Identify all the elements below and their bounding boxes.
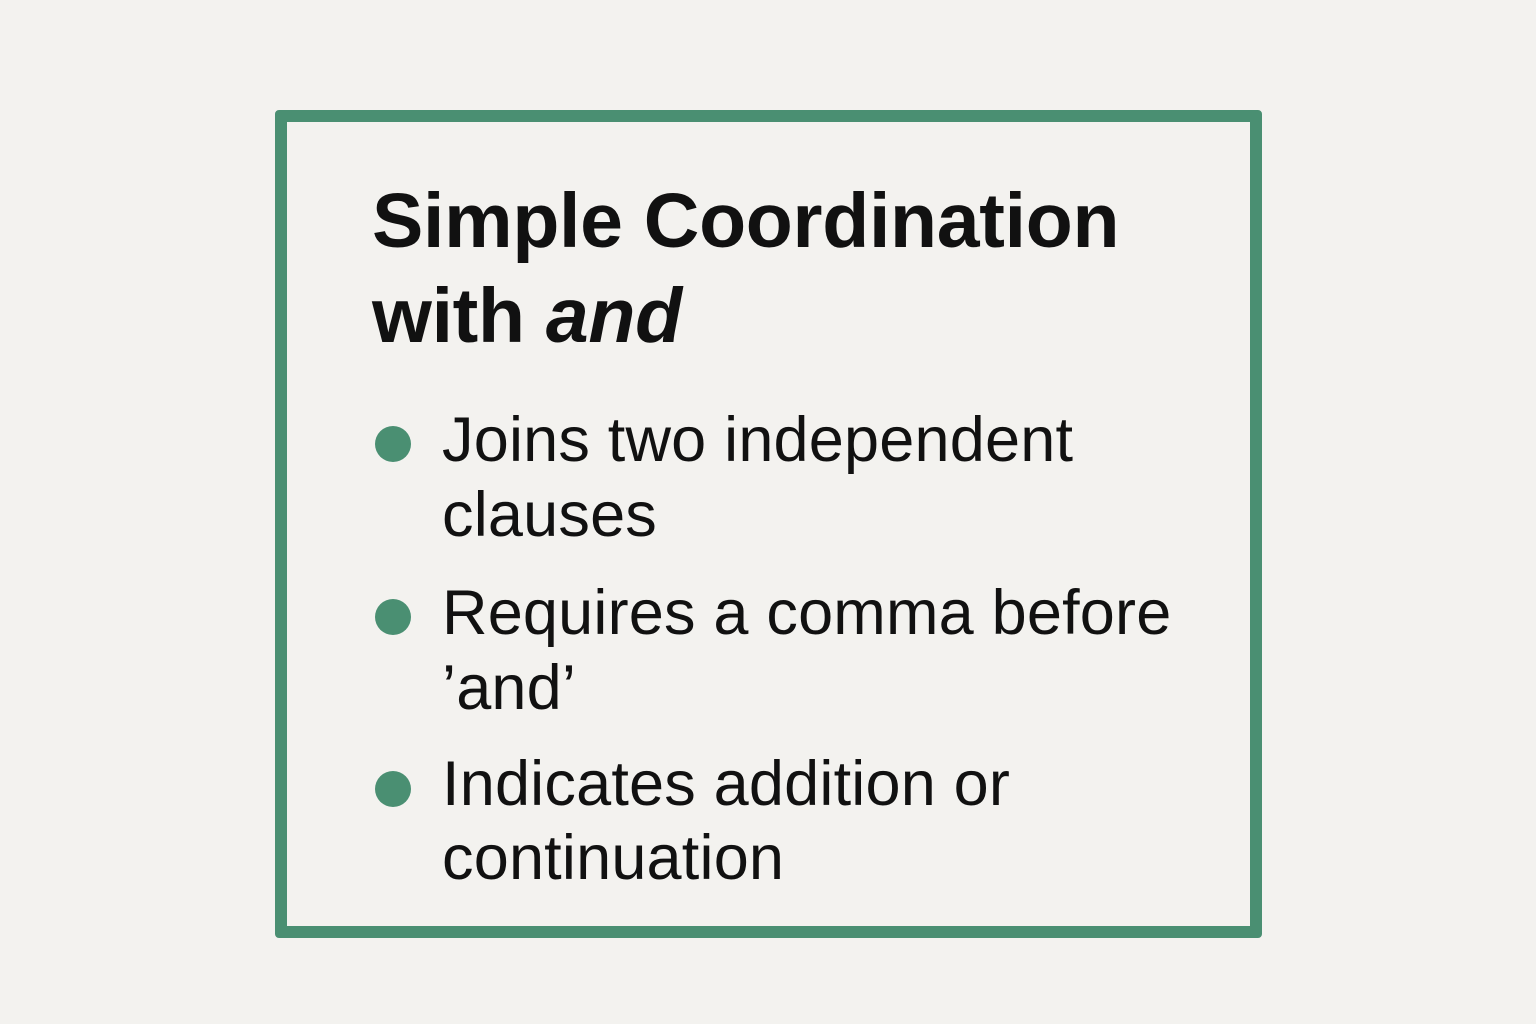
bullet 3: continuation xyxy=(442,823,784,893)
title: with and xyxy=(372,273,682,359)
bullet 1 xyxy=(375,405,1073,550)
title xyxy=(372,178,1119,359)
bullet 1: Joins two independent xyxy=(442,405,1073,475)
bullet 3: Indicates addition or xyxy=(442,749,1010,819)
bullet 2 xyxy=(375,578,1171,723)
title: Simple Coordination xyxy=(372,178,1119,264)
bullet list xyxy=(375,405,1171,893)
bullet 2: Requires a comma before xyxy=(442,578,1171,648)
bullet 1: clauses xyxy=(442,480,657,550)
bullet 2: ’and’ xyxy=(442,653,576,723)
bullet 3 xyxy=(375,749,1010,893)
panel: bordered card xyxy=(275,110,1262,938)
